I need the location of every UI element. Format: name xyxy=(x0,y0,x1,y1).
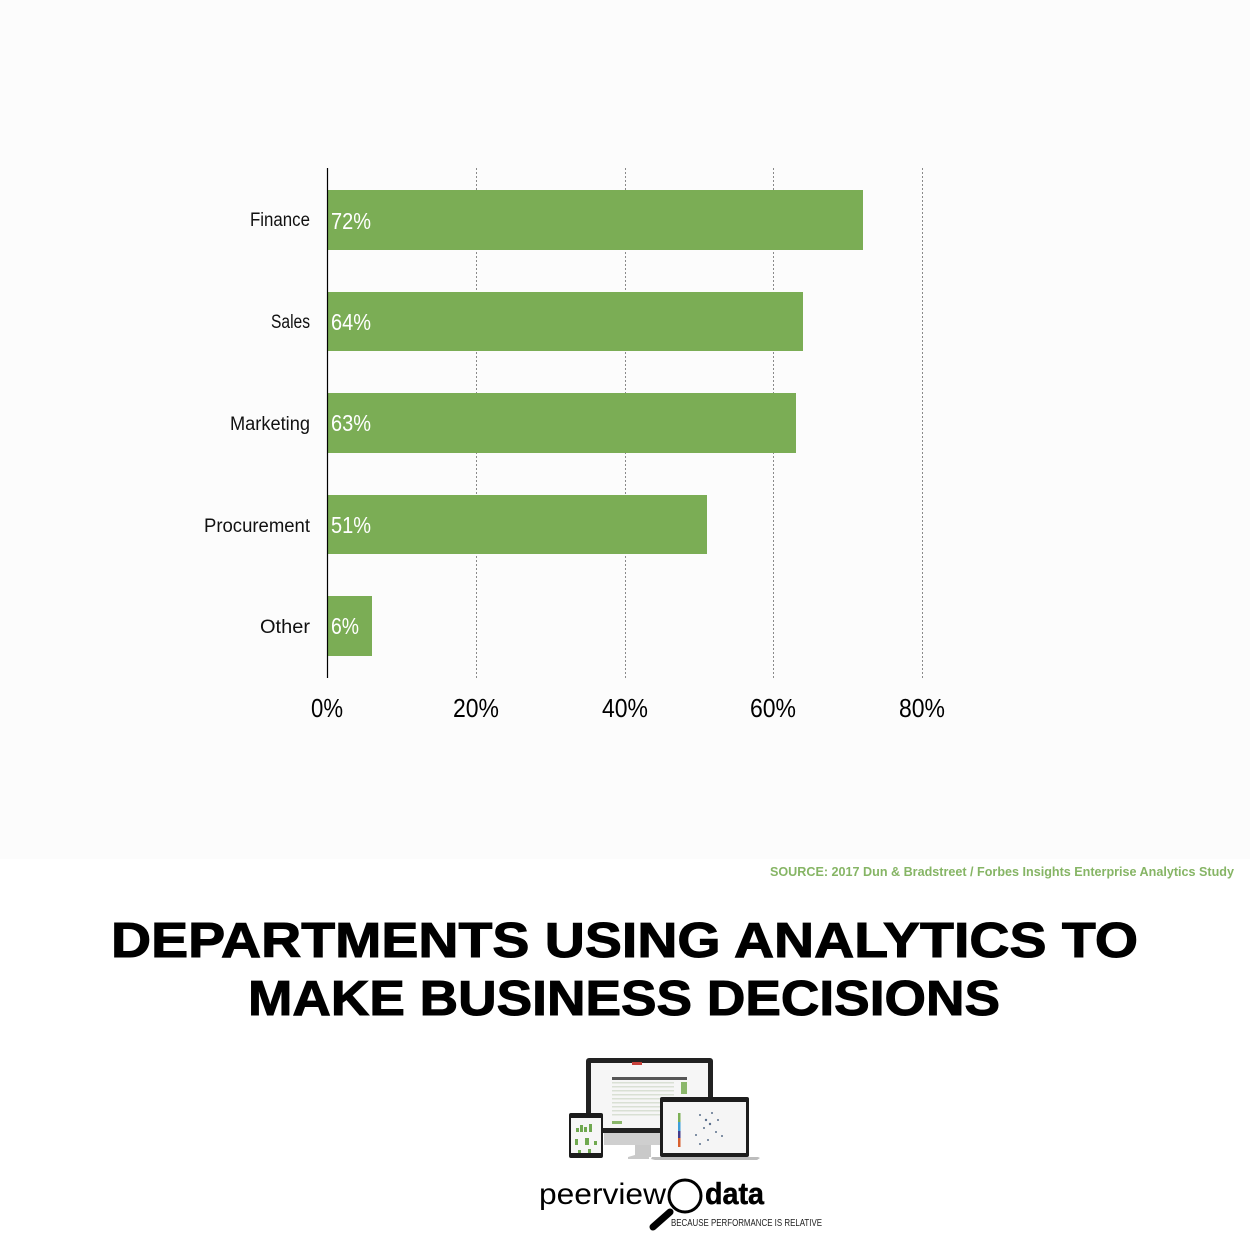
icon: desktop monitor xyxy=(586,1058,713,1159)
bar: Procurement xyxy=(327,495,707,554)
category labels: Marketing xyxy=(230,414,310,435)
title: MAKE BUSINESS DECISIONS xyxy=(248,972,1000,1026)
icon: laptop xyxy=(651,1097,760,1160)
icon: tablet xyxy=(569,1113,603,1158)
logo: peerview data: peerview xyxy=(539,1178,666,1211)
axis labels: 80% xyxy=(899,693,945,723)
logo: peerview data: BECAUSE PERFORMANCE IS RELATIVE xyxy=(671,1218,822,1229)
bar: Sales xyxy=(327,292,803,351)
axis labels: 0% xyxy=(311,693,343,723)
category labels: Procurement xyxy=(204,516,311,537)
axis labels: 20% xyxy=(453,693,499,723)
logo: peerview data: data xyxy=(705,1176,765,1211)
bar: Finance: 72% xyxy=(331,208,371,234)
icon: device mockups xyxy=(569,1058,760,1160)
bar: Marketing: 63% xyxy=(331,410,371,436)
icon: magnifying glass xyxy=(653,1180,701,1227)
bar chart xyxy=(204,168,945,723)
title: DEPARTMENTS USING ANALYTICS TO xyxy=(111,914,1138,968)
axis labels: 40% xyxy=(602,693,648,723)
category labels: Finance xyxy=(250,210,310,231)
category labels xyxy=(204,210,311,638)
axis labels xyxy=(311,693,945,723)
title xyxy=(111,914,1138,1026)
source note: SOURCE: 2017 Dun & Bradstreet / Forbes Insights Enterprise Analytics Study xyxy=(770,864,1235,879)
bar: Procurement: 51% xyxy=(331,512,371,538)
logo: peerview data xyxy=(539,1176,822,1229)
bar: Sales: 64% xyxy=(331,309,371,335)
bar: Marketing xyxy=(327,393,796,453)
bar: Finance xyxy=(327,190,863,250)
category labels: Sales xyxy=(271,312,310,333)
axis labels: 60% xyxy=(750,693,796,723)
bar: Other xyxy=(327,596,372,656)
bar: Other: 6% xyxy=(331,613,359,639)
category labels: Other xyxy=(260,617,311,638)
